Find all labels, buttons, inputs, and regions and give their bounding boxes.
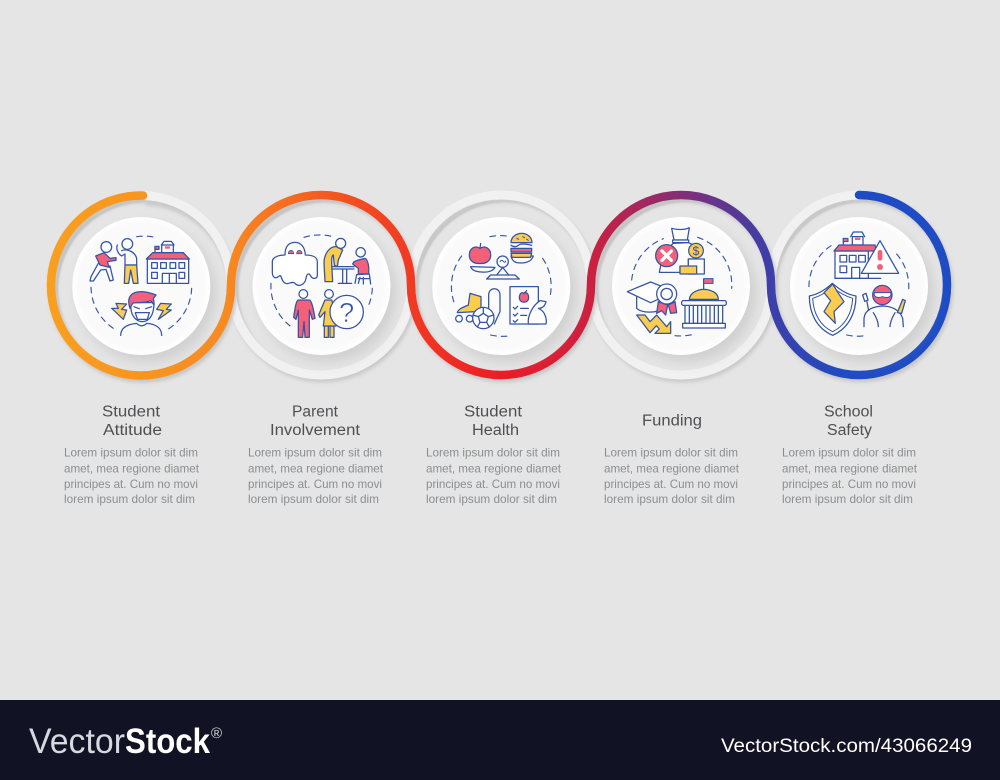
heading: School	[824, 404, 873, 420]
icon: money bag, graduation cap, government building: $	[693, 244, 700, 258]
disc	[72, 217, 210, 355]
description: amet, mea regione diamet	[248, 462, 384, 476]
description: principes at. Cum no movi	[248, 477, 382, 491]
description: principes at. Cum no movi	[426, 477, 560, 491]
description: Lorem ipsum dolor sit dim	[604, 446, 738, 460]
panel: Funding	[604, 217, 756, 506]
description: Lorem ipsum dolor sit dim	[782, 446, 916, 460]
description	[604, 446, 740, 506]
panel: Student Attitude	[64, 217, 216, 506]
light ring track	[141, 195, 859, 375]
heading: Involvement	[270, 422, 361, 439]
image id url: VectorStock.com/43066249	[721, 736, 972, 757]
panel: Parent Involvement	[248, 217, 396, 506]
disc	[252, 217, 390, 355]
description	[426, 446, 562, 506]
description: lorem ipsum dolor sit dim	[782, 492, 913, 506]
icon: fighting students, school, angry student	[90, 236, 192, 335]
logo wordmark	[29, 722, 222, 761]
description: Lorem ipsum dolor sit dim	[64, 446, 198, 460]
light ring shadow	[145, 198, 861, 378]
heading: Student	[102, 404, 161, 420]
description: amet, mea regione diamet	[426, 462, 562, 476]
description: lorem ipsum dolor sit dim	[426, 492, 557, 506]
panel: Student Health	[426, 217, 576, 506]
disc	[432, 217, 570, 355]
disc	[790, 217, 928, 355]
description: principes at. Cum no movi	[64, 477, 198, 491]
colored ribbon shadow	[53, 198, 949, 378]
description: lorem ipsum dolor sit dim	[248, 492, 379, 506]
colored serpentine ribbon	[51, 195, 947, 375]
description: principes at. Cum no movi	[604, 477, 738, 491]
heading: Funding	[642, 412, 702, 430]
description: Lorem ipsum dolor sit dim	[248, 446, 382, 460]
description: lorem ipsum dolor sit dim	[64, 492, 195, 506]
icon: school warning, broken shield, intruder	[809, 232, 909, 336]
description	[782, 446, 918, 506]
description	[64, 446, 200, 506]
description: amet, mea regione diamet	[604, 462, 740, 476]
description: amet, mea regione diamet	[64, 462, 200, 476]
heading: Parent	[292, 404, 339, 420]
icon: ghost, seated parent and teacher, confused parents: ?	[339, 297, 354, 328]
heading: Attitude	[103, 422, 162, 439]
description: Lorem ipsum dolor sit dim	[426, 446, 560, 460]
icon: ghost, seated parent and teacher, confused parents	[271, 235, 372, 337]
description: amet, mea regione diamet	[782, 462, 918, 476]
logo wordmark: Stock	[125, 722, 210, 761]
panel: School Safety	[782, 217, 934, 506]
icon: healthy food balance, sports, diet plan	[451, 233, 551, 336]
description: lorem ipsum dolor sit dim	[604, 492, 735, 506]
heading: Health	[472, 422, 519, 439]
heading: Safety	[827, 422, 872, 439]
logo wordmark: Vector	[29, 722, 125, 761]
footer bar	[0, 700, 1000, 780]
description: principes at. Cum no movi	[782, 477, 916, 491]
logo wordmark: ®	[211, 725, 222, 742]
inner ring shadows	[55, 199, 920, 346]
description	[248, 446, 384, 506]
heading: Student	[464, 404, 523, 420]
icon: money bag, graduation cap, government building	[627, 228, 732, 336]
disc	[612, 217, 750, 355]
